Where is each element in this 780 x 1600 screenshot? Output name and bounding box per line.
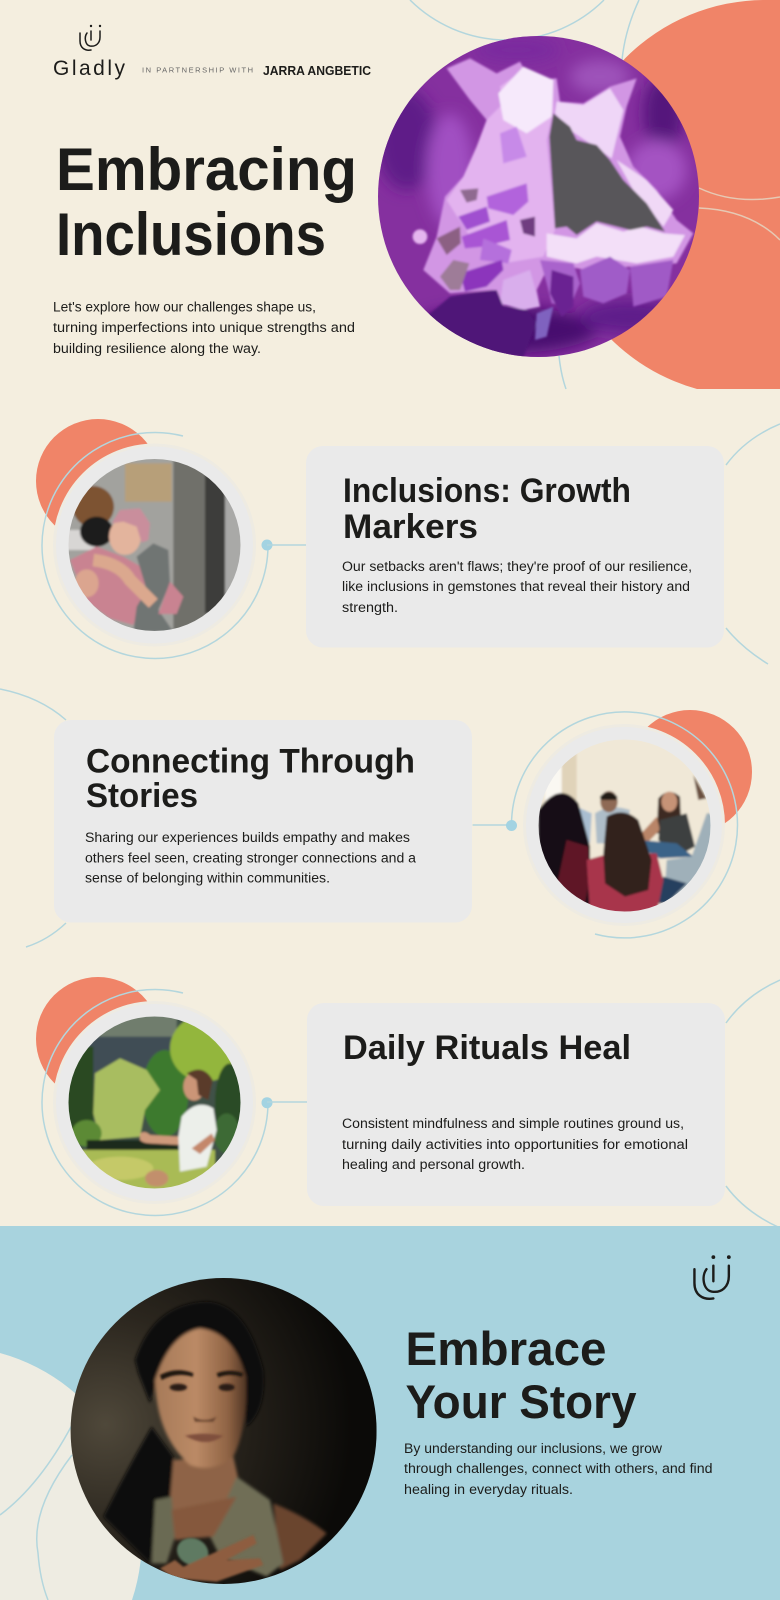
body text: like inclusions in gemstones that reveal their history and — [342, 579, 690, 594]
heading: Markers — [343, 508, 478, 546]
photo: two women hugging — [65, 457, 243, 633]
intro text: building resilience along the way. — [53, 341, 261, 356]
section 3: daily rituals heal — [36, 977, 780, 1228]
body text: Sharing our experiences builds empathy and makes — [85, 830, 410, 845]
body text: Consistent mindfulness and simple routines ground us, — [342, 1116, 684, 1131]
body text — [404, 1441, 712, 1497]
title — [56, 136, 357, 268]
photo: meditation in a garden — [65, 1015, 245, 1190]
body text: others feel seen, creating stronger connections and a — [85, 850, 417, 866]
photo: portrait of a woman — [68, 1277, 377, 1585]
photo: amethyst geode — [377, 35, 700, 358]
hero decoration: thin arcs — [410, 0, 780, 389]
side arcs — [726, 424, 780, 664]
card — [307, 1003, 725, 1206]
logo: Gladly — [53, 25, 126, 80]
partnership line — [142, 63, 372, 78]
partnership line: IN PARTNERSHIP WITH — [142, 66, 253, 75]
side arcs — [726, 980, 780, 1228]
section 2: connecting through stories — [0, 689, 752, 947]
card — [306, 446, 724, 648]
orbit line — [42, 432, 268, 658]
decorative pale circle — [0, 1353, 142, 1600]
body text — [342, 559, 692, 615]
title: Inclusions — [56, 201, 326, 268]
body text: through challenges, connect with others, and find — [404, 1461, 712, 1476]
body text: healing in everyday rituals. — [404, 1482, 573, 1497]
decorative coral shape — [36, 977, 160, 1101]
intro text: Let's explore how our challenges shape us, — [53, 300, 316, 315]
body text: sense of belonging within communities. — [85, 870, 330, 886]
icon: Gladly mark — [694, 1255, 731, 1299]
heading — [406, 1322, 636, 1428]
heading: Stories — [86, 777, 198, 815]
heading: Your Story — [406, 1375, 636, 1428]
connector dot — [262, 1097, 272, 1108]
title: Embracing — [56, 136, 357, 203]
connector line — [473, 824, 512, 826]
connector dot — [506, 820, 517, 831]
side arcs — [0, 689, 66, 947]
heading — [86, 742, 415, 815]
decorative coral shape — [628, 710, 752, 834]
decorative thin lines — [0, 1425, 72, 1600]
connector dot — [262, 540, 272, 550]
body text: Our setbacks aren't flaws; they're proof of our resilience, — [342, 559, 692, 574]
photo frame ring — [54, 445, 254, 645]
connector line — [267, 544, 306, 546]
partnership line: JARRA ANGBETIC — [263, 63, 372, 78]
heading: Embrace — [406, 1322, 606, 1375]
body text — [85, 830, 417, 886]
icon: Gladly mark — [80, 25, 101, 50]
body text: strength. — [342, 600, 398, 615]
body text: By understanding our inclusions, we grow — [404, 1441, 662, 1456]
body text: turning daily activities into opportunities for emotional — [342, 1137, 688, 1152]
heading: Daily Rituals Heal — [343, 1029, 631, 1067]
heading — [343, 472, 631, 546]
intro text: turning imperfections into unique strengths and — [53, 320, 355, 335]
heading: Connecting Through — [86, 742, 415, 780]
hero decoration: coral circles — [552, 0, 780, 389]
orbit line — [42, 989, 268, 1215]
body text: healing and personal growth. — [342, 1157, 525, 1172]
heading: Inclusions: Growth — [343, 472, 631, 510]
card — [54, 720, 472, 922]
section 1: growth markers — [36, 419, 780, 664]
wordmark: Gladly — [53, 57, 126, 80]
photo: group conversation — [538, 738, 712, 913]
connector line — [267, 1101, 307, 1103]
panel background — [0, 1226, 780, 1600]
photo frame ring — [524, 726, 724, 924]
intro text — [53, 300, 355, 356]
orbit line — [511, 712, 737, 938]
photo frame ring — [54, 1002, 254, 1202]
decorative coral shape — [36, 419, 160, 543]
footer panel — [0, 1226, 780, 1600]
body text — [342, 1116, 688, 1172]
